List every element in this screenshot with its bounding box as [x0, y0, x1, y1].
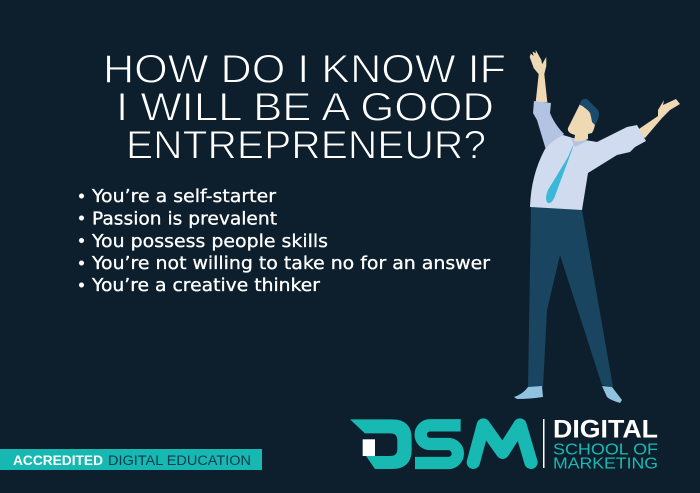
collar	[571, 138, 587, 147]
shoes	[514, 386, 622, 403]
title	[103, 48, 506, 168]
shirt	[530, 125, 646, 210]
logo wordmark: MARKETING	[553, 455, 658, 472]
accreditation banner: ACCREDITED	[13, 453, 103, 468]
left sleeve	[533, 101, 564, 150]
accreditation banner	[0, 449, 262, 470]
logo wordmark: DIGITAL	[553, 415, 658, 443]
bullet list: You’re a self-starter	[91, 186, 277, 207]
tie	[546, 143, 574, 203]
hair	[580, 99, 599, 125]
bullet list	[79, 186, 491, 296]
bullet list: You’re not willing to take no for an answer	[91, 253, 491, 274]
illustration: businessman with raised arms	[514, 51, 680, 403]
bullet list: Passion is prevalent	[92, 208, 277, 230]
right forearm and hand	[636, 99, 680, 138]
logo: DSM Digital School of Marketing	[350, 415, 658, 472]
trousers	[528, 207, 613, 387]
logo wordmark: SCHOOL OF	[553, 441, 658, 458]
logo mark	[350, 419, 531, 469]
bullet list: You possess people skills	[91, 231, 328, 252]
raised left arm and hand	[530, 51, 547, 102]
title: HOW DO I KNOW IF	[103, 48, 506, 92]
bullet list: You’re a creative thinker	[91, 275, 321, 296]
title: I WILL BE A GOOD	[116, 86, 494, 130]
accreditation banner: DIGITAL EDUCATION	[108, 453, 251, 468]
logo wordmark	[553, 415, 658, 472]
neck and face	[568, 104, 595, 141]
title: ENTREPRENEUR?	[126, 124, 486, 168]
